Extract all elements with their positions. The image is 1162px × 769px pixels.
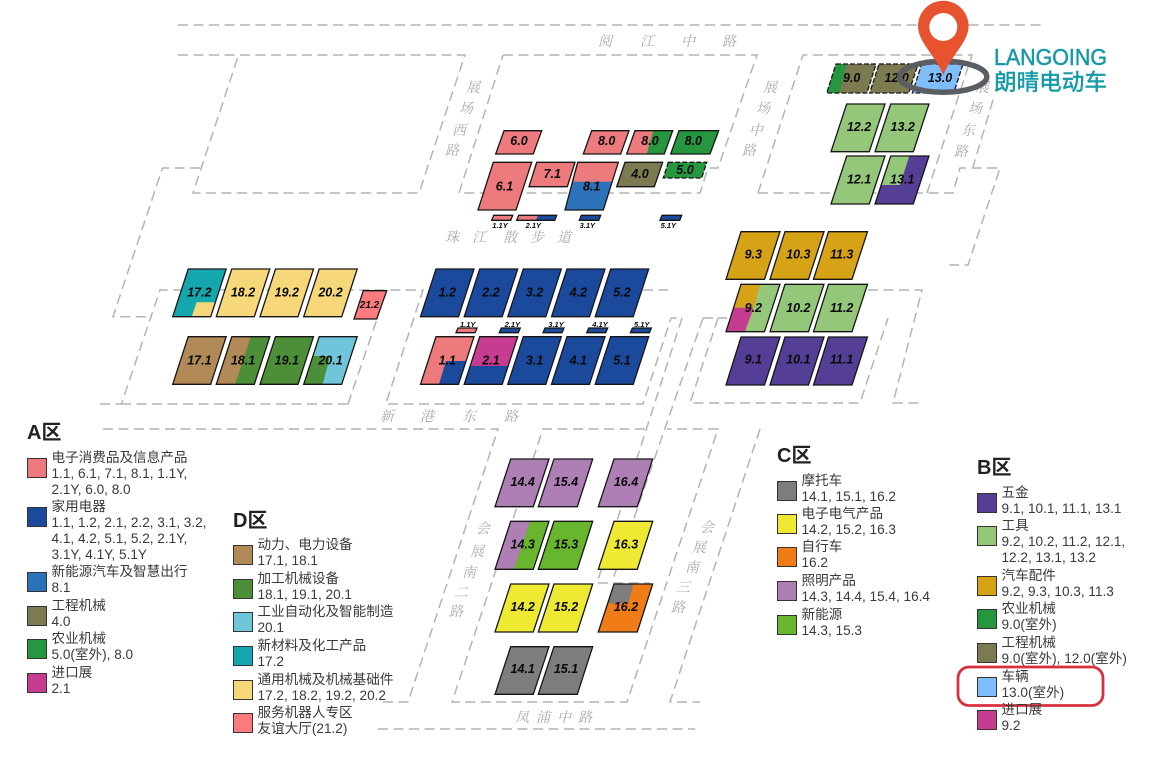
road outlines (100, 25, 1045, 729)
hall 3.1: 3.1 (526, 354, 543, 368)
hall 20.1 (304, 337, 357, 384)
halls: zone D (173, 269, 387, 384)
legend item: processing machinery: 18.1, 19.1, 20.1 (258, 587, 352, 602)
legend item: motorcycles: 摩托车 (802, 473, 842, 488)
hall 12.1: 12.1 (847, 172, 871, 186)
pin ring (900, 61, 987, 92)
legend item: imports: 9.2 (1002, 718, 1020, 733)
legend item: consumer electronics (27, 450, 187, 497)
legend item: NEV and smart mobility (27, 564, 187, 595)
hall 5.1Y: 5.1Y (634, 320, 650, 329)
road: Zhanchang West: 展场西路 (445, 80, 482, 159)
heading: C zone: C区 (777, 445, 811, 467)
legend item: consumer electronics: 2.1Y, 6.0, 8.0 (52, 482, 131, 497)
hall 10.2: 10.2 (786, 301, 811, 315)
hall 1.1Y (456, 320, 477, 333)
hall 7.1 (529, 162, 575, 187)
hall 1.1 (420, 337, 474, 384)
legend item: construction machinery: 4.0 (52, 614, 70, 629)
legend item: lighting: 照明产品 (802, 573, 856, 588)
hall 17.2 (173, 269, 226, 317)
pin hole (929, 13, 957, 41)
heading: B zone: B区 (977, 457, 1011, 479)
hall 14.4 (495, 459, 549, 507)
legend item: vehicles: 车辆 (1002, 669, 1029, 684)
logo wordmark: LANGOING (994, 44, 1107, 70)
legend item: auto parts (977, 568, 1114, 599)
hall 8.0 split: 8.0 (641, 134, 659, 148)
legend item: bicycles: 16.2 (802, 555, 828, 570)
road: Zhanchang Middle: 展场中路 (742, 80, 779, 159)
legend item: electrical products: 14.2, 15.2, 16.3 (802, 522, 896, 537)
legend item: home appliances: 3.1Y, 4.1Y, 5.1Y (52, 547, 147, 562)
hall 16.4: 16.4 (614, 475, 638, 489)
legend item: construction machinery (27, 598, 106, 629)
hall 13.2: 13.2 (891, 120, 915, 134)
road: Xingang East: 新港东路 (380, 409, 519, 425)
legend item: agricultural machinery (977, 601, 1057, 632)
legend item: processing machinery: 加工机械设备 (258, 571, 339, 586)
hall 10.2 (770, 284, 824, 332)
legend item: construction machinery (977, 635, 1127, 666)
legend item: power equipment (233, 537, 353, 568)
legend item: hardware: 五金 (1002, 485, 1029, 500)
hall 3.2 (508, 269, 561, 317)
legend: zone B (977, 457, 1127, 733)
hall 3.1Y: 3.1Y (548, 320, 565, 329)
hall 11.3 (814, 232, 868, 279)
hall 14.3: 14.3 (511, 538, 535, 552)
hall 4.2 (552, 269, 605, 317)
hall 8.0 green (671, 131, 719, 154)
heading: A zone: A区 (27, 422, 61, 444)
legend item: service robots: 友谊大厅(21.2) (258, 721, 347, 736)
road: Pearl River promenade: 珠江散步道 (445, 230, 573, 246)
legend item: new energy: 新能源 (802, 607, 842, 622)
legend item: consumer electronics: 电子消费品及信息产品 (52, 450, 187, 465)
hall 20.1: 20.1 (317, 354, 343, 368)
halls: zone B (726, 64, 963, 385)
hall 15.3 (538, 521, 593, 569)
hall 6.0: 6.0 (510, 134, 528, 148)
red highlight around vehicle legend (958, 667, 1103, 706)
hall 11.1: 11.1 (830, 352, 853, 366)
halls: zone C (495, 459, 653, 694)
legend item: power equipment: 动力、电力设备 (258, 537, 353, 552)
hall 1.2: 1.2 (439, 286, 456, 300)
legend item: service robots: 服务机器人专区 (258, 705, 353, 720)
legend item: NEV and smart mobility: 新能源汽车及智慧出行 (52, 564, 187, 579)
legend item: imports (27, 665, 92, 696)
hall 2.1Y (499, 320, 521, 333)
hall 9.0 outdoor (827, 64, 876, 93)
hall 8.0 green: 8.0 (685, 134, 702, 148)
hall 2.1 (464, 337, 518, 384)
hall 9.1 (726, 337, 780, 385)
legend item: imports: 进口展 (1002, 702, 1042, 717)
legend item: tools (977, 518, 1125, 565)
hall 8.0: 8.0 (598, 134, 615, 148)
hall 8.0 (583, 131, 629, 154)
legend item: processing machinery (233, 571, 352, 602)
hall 9.0 outdoor: 9.0 (843, 71, 860, 85)
hall 20.2 (304, 269, 357, 317)
hall 20.2: 20.2 (317, 286, 343, 300)
logo chinese name: 朗晴电动车 (994, 70, 1107, 95)
hall 19.1: 19.1 (275, 354, 299, 368)
hall 3.1Y upper (579, 215, 601, 230)
hall 12.0 outdoor (870, 64, 918, 93)
location pin marker (900, 1, 987, 92)
hall 8.0 split (627, 131, 673, 154)
hall 3.1Y upper: 3.1Y (580, 221, 596, 230)
hall 9.2 (726, 284, 780, 332)
hall 5.0 outdoor (663, 162, 707, 178)
halls: zone A lower block (420, 269, 651, 384)
halls: zone A upper block (478, 131, 719, 230)
hall 15.3: 15.3 (554, 538, 578, 552)
hall 16.3: 16.3 (614, 538, 638, 552)
legend: zone C (777, 445, 930, 638)
hall 13.1 (875, 156, 929, 204)
legend item: bicycles (777, 539, 842, 570)
hall 14.2: 14.2 (511, 600, 535, 614)
legend item: new energy (777, 607, 862, 638)
legend item: tools: 12.2, 13.1, 13.2 (1002, 550, 1096, 565)
hall 2.1Y upper (517, 215, 557, 230)
hall 10.3: 10.3 (786, 248, 811, 262)
legend item: general machinery: 17.2, 18.2, 19.2, 20.2 (258, 688, 386, 703)
hall 15.1 (538, 647, 593, 694)
hall 16.4 (598, 459, 653, 507)
legend item: lighting: 14.3, 14.4, 15.4, 16.4 (802, 589, 930, 604)
legend item: electrical products (777, 506, 896, 537)
legend item: new materials: 17.2 (258, 654, 284, 669)
hall 6.0 (496, 131, 542, 154)
hall 12.0 outdoor: 12.0 (885, 71, 909, 85)
road: Huizhan South 2: 会展南二路 (449, 521, 492, 620)
hall 15.2 (538, 584, 593, 632)
hall 11.3: 11.3 (830, 248, 853, 262)
legend item: home appliances: 家用电器 (52, 499, 106, 514)
legend item: vehicles: 13.0(室外) (1002, 685, 1064, 700)
hall 19.2 (260, 269, 314, 317)
legend item: home appliances (27, 499, 206, 562)
hall 5.1Y upper: 5.1Y (661, 221, 677, 230)
legend item: hardware (977, 485, 1121, 516)
hall 5.1Y upper (660, 215, 682, 230)
hall 13.2 (875, 104, 929, 152)
hall 2.2 (464, 269, 518, 317)
hall 5.1 (595, 337, 649, 384)
hall 15.4 (538, 459, 593, 507)
legend item: imports (977, 702, 1042, 733)
hall 6.1 (478, 162, 532, 210)
legend item: motorcycles (777, 473, 896, 504)
hall 18.1: 18.1 (231, 354, 255, 368)
legend item: new energy: 14.3, 15.3 (802, 623, 862, 638)
hall 4.1Y (587, 320, 609, 333)
hall 2.1Y: 2.1Y (504, 320, 521, 329)
hall 11.2: 11.2 (830, 301, 853, 315)
hall 14.3 (495, 521, 549, 569)
legend item: industrial automation: 工业自动化及智能制造 (258, 604, 393, 619)
legend item: new materials (233, 638, 366, 669)
hall 17.2: 17.2 (187, 286, 212, 300)
legend item: NEV and smart mobility: 8.1 (52, 580, 70, 595)
hall 12.2 (831, 104, 885, 152)
hall 5.1Y (630, 320, 651, 333)
legend item: agricultural machinery (27, 631, 133, 662)
legend item: vehicles (977, 669, 1064, 700)
hall 9.2: 9.2 (745, 301, 762, 315)
hall 15.1: 15.1 (554, 662, 578, 676)
legend: zone D (233, 510, 393, 736)
hall 3.1 (508, 337, 561, 384)
hall 4.0: 4.0 (630, 167, 649, 181)
hall 1.1: 1.1 (439, 354, 456, 368)
legend item: tools: 工具 (1002, 518, 1029, 533)
legend item: hardware: 9.1, 10.1, 11.1, 13.1 (1002, 501, 1121, 516)
hall 4.1: 4.1 (569, 354, 587, 368)
legend item: construction machinery: 9.0(室外), 12.0(室外) (1002, 651, 1127, 666)
legend item: new materials: 新材料及化工产品 (258, 638, 366, 653)
pin body (918, 1, 969, 75)
heading: D zone: D区 (233, 510, 267, 532)
hall 5.2 (595, 269, 649, 317)
legend item: bicycles: 自行车 (802, 539, 842, 554)
hall 8.1: 8.1 (583, 180, 600, 194)
hall 13.1: 13.1 (890, 172, 915, 186)
hall 3.1Y (543, 320, 565, 333)
hall 16.2: 16.2 (614, 600, 638, 614)
legend item: agricultural machinery: 农业机械 (1002, 601, 1056, 616)
hall 19.2: 19.2 (275, 286, 299, 300)
legend item: industrial automation: 20.1 (258, 620, 284, 635)
road: Minjiang Middle: 阅江中路 (598, 34, 737, 50)
hall 1.1Y: 1.1Y (460, 320, 476, 329)
hall 21.2 (354, 291, 387, 319)
hall 4.0 (617, 162, 663, 187)
legend item: industrial automation (233, 604, 393, 635)
hall 4.2: 4.2 (569, 286, 587, 300)
legend item: tools: 9.2, 10.2, 11.2, 12.1, (1002, 534, 1125, 549)
hall 17.1: 17.1 (187, 354, 212, 368)
legend item: auto parts: 9.2, 9.3, 10.3, 11.3 (1002, 584, 1114, 599)
hall 10.1 (770, 337, 824, 385)
hall 2.2: 2.2 (481, 286, 500, 300)
hall 16.2 (598, 584, 653, 632)
hall 21.2: 21.2 (359, 300, 380, 311)
hall 1.2 (420, 269, 474, 317)
legend item: home appliances: 4.1, 4.2, 5.1, 5.2, 2.1Y, (52, 531, 187, 546)
legend item: agricultural machinery: 农业机械 (52, 631, 106, 646)
hall 1.1Y upper (492, 215, 513, 230)
hall 17.1 (173, 337, 226, 384)
hall 6.1: 6.1 (496, 180, 513, 194)
hall 18.2: 18.2 (231, 286, 255, 300)
hall 19.1 (260, 337, 314, 384)
hall 5.1: 5.1 (613, 354, 631, 368)
legend item: auto parts: 汽车配件 (1002, 568, 1056, 583)
legend item: motorcycles: 14.1, 15.1, 16.2 (802, 489, 896, 504)
hall 9.1: 9.1 (745, 352, 762, 366)
hall 1.1Y upper: 1.1Y (492, 221, 509, 230)
hall 10.1: 10.1 (786, 352, 811, 366)
hall 4.1Y: 4.1Y (591, 320, 609, 329)
hall 4.1 (552, 337, 605, 384)
hall 13.0 outdoor (912, 64, 963, 93)
hall 14.1 (495, 647, 549, 694)
hall 7.1: 7.1 (544, 167, 561, 181)
legend item: agricultural machinery: 5.0(室外), 8.0 (52, 647, 133, 662)
hall 16.3 (598, 521, 653, 569)
legend item: power equipment: 17.1, 18.1 (258, 553, 318, 568)
road: Zhanchang East: 展场东路 (954, 80, 991, 160)
hall 15.4: 15.4 (554, 475, 578, 489)
legend item: construction machinery: 工程机械 (52, 598, 106, 613)
legend item: general machinery (233, 672, 393, 703)
road: Fengpu Middle: 凤浦中路 (515, 710, 593, 726)
hall 14.1: 14.1 (511, 662, 535, 676)
legend: zone A (27, 422, 206, 696)
hall 14.2 (495, 584, 549, 632)
hall 12.2: 12.2 (847, 120, 871, 134)
hall 12.1 (831, 156, 885, 204)
legend item: service robots (233, 705, 353, 736)
legend item: agricultural machinery: 9.0(室外) (1002, 617, 1057, 632)
legend item: home appliances: 1.1, 1.2, 2.1, 2.2, 3.1, 3.2, (52, 515, 206, 530)
hall 14.4: 14.4 (511, 475, 535, 489)
legend item: general machinery: 通用机械及机械基础件 (258, 672, 393, 687)
hall 11.2 (814, 284, 868, 332)
road labels (380, 34, 991, 726)
hall 18.2 (216, 269, 270, 317)
hall 5.0 outdoor: 5.0 (676, 163, 694, 177)
hall 13.0 outdoor: 13.0 (928, 71, 952, 85)
hall 9.3: 9.3 (745, 248, 762, 262)
legend item: imports: 2.1 (52, 681, 70, 696)
legend item: lighting (777, 573, 930, 604)
hall 18.1 (216, 337, 270, 384)
logo: Langqing (994, 44, 1107, 95)
hall 15.2: 15.2 (554, 600, 578, 614)
hall 2.1: 2.1 (481, 354, 500, 368)
road: Huizhan South 3: 会展南三路 (671, 520, 716, 616)
hall 9.3 (726, 232, 780, 279)
hall 5.2: 5.2 (613, 286, 631, 300)
hall 11.1 (814, 337, 868, 385)
legend item: electrical products: 电子电气产品 (802, 506, 883, 521)
legend item: imports: 进口展 (52, 665, 92, 680)
legend item: consumer electronics: 1.1, 6.1, 7.1, 8.1, 1.1Y, (52, 466, 187, 481)
hall 10.3 (770, 232, 824, 279)
hall 8.1 (565, 162, 618, 210)
hall 3.2: 3.2 (526, 286, 543, 300)
hall 2.1Y upper: 2.1Y (525, 221, 542, 230)
legend item: construction machinery: 工程机械 (1002, 635, 1056, 650)
